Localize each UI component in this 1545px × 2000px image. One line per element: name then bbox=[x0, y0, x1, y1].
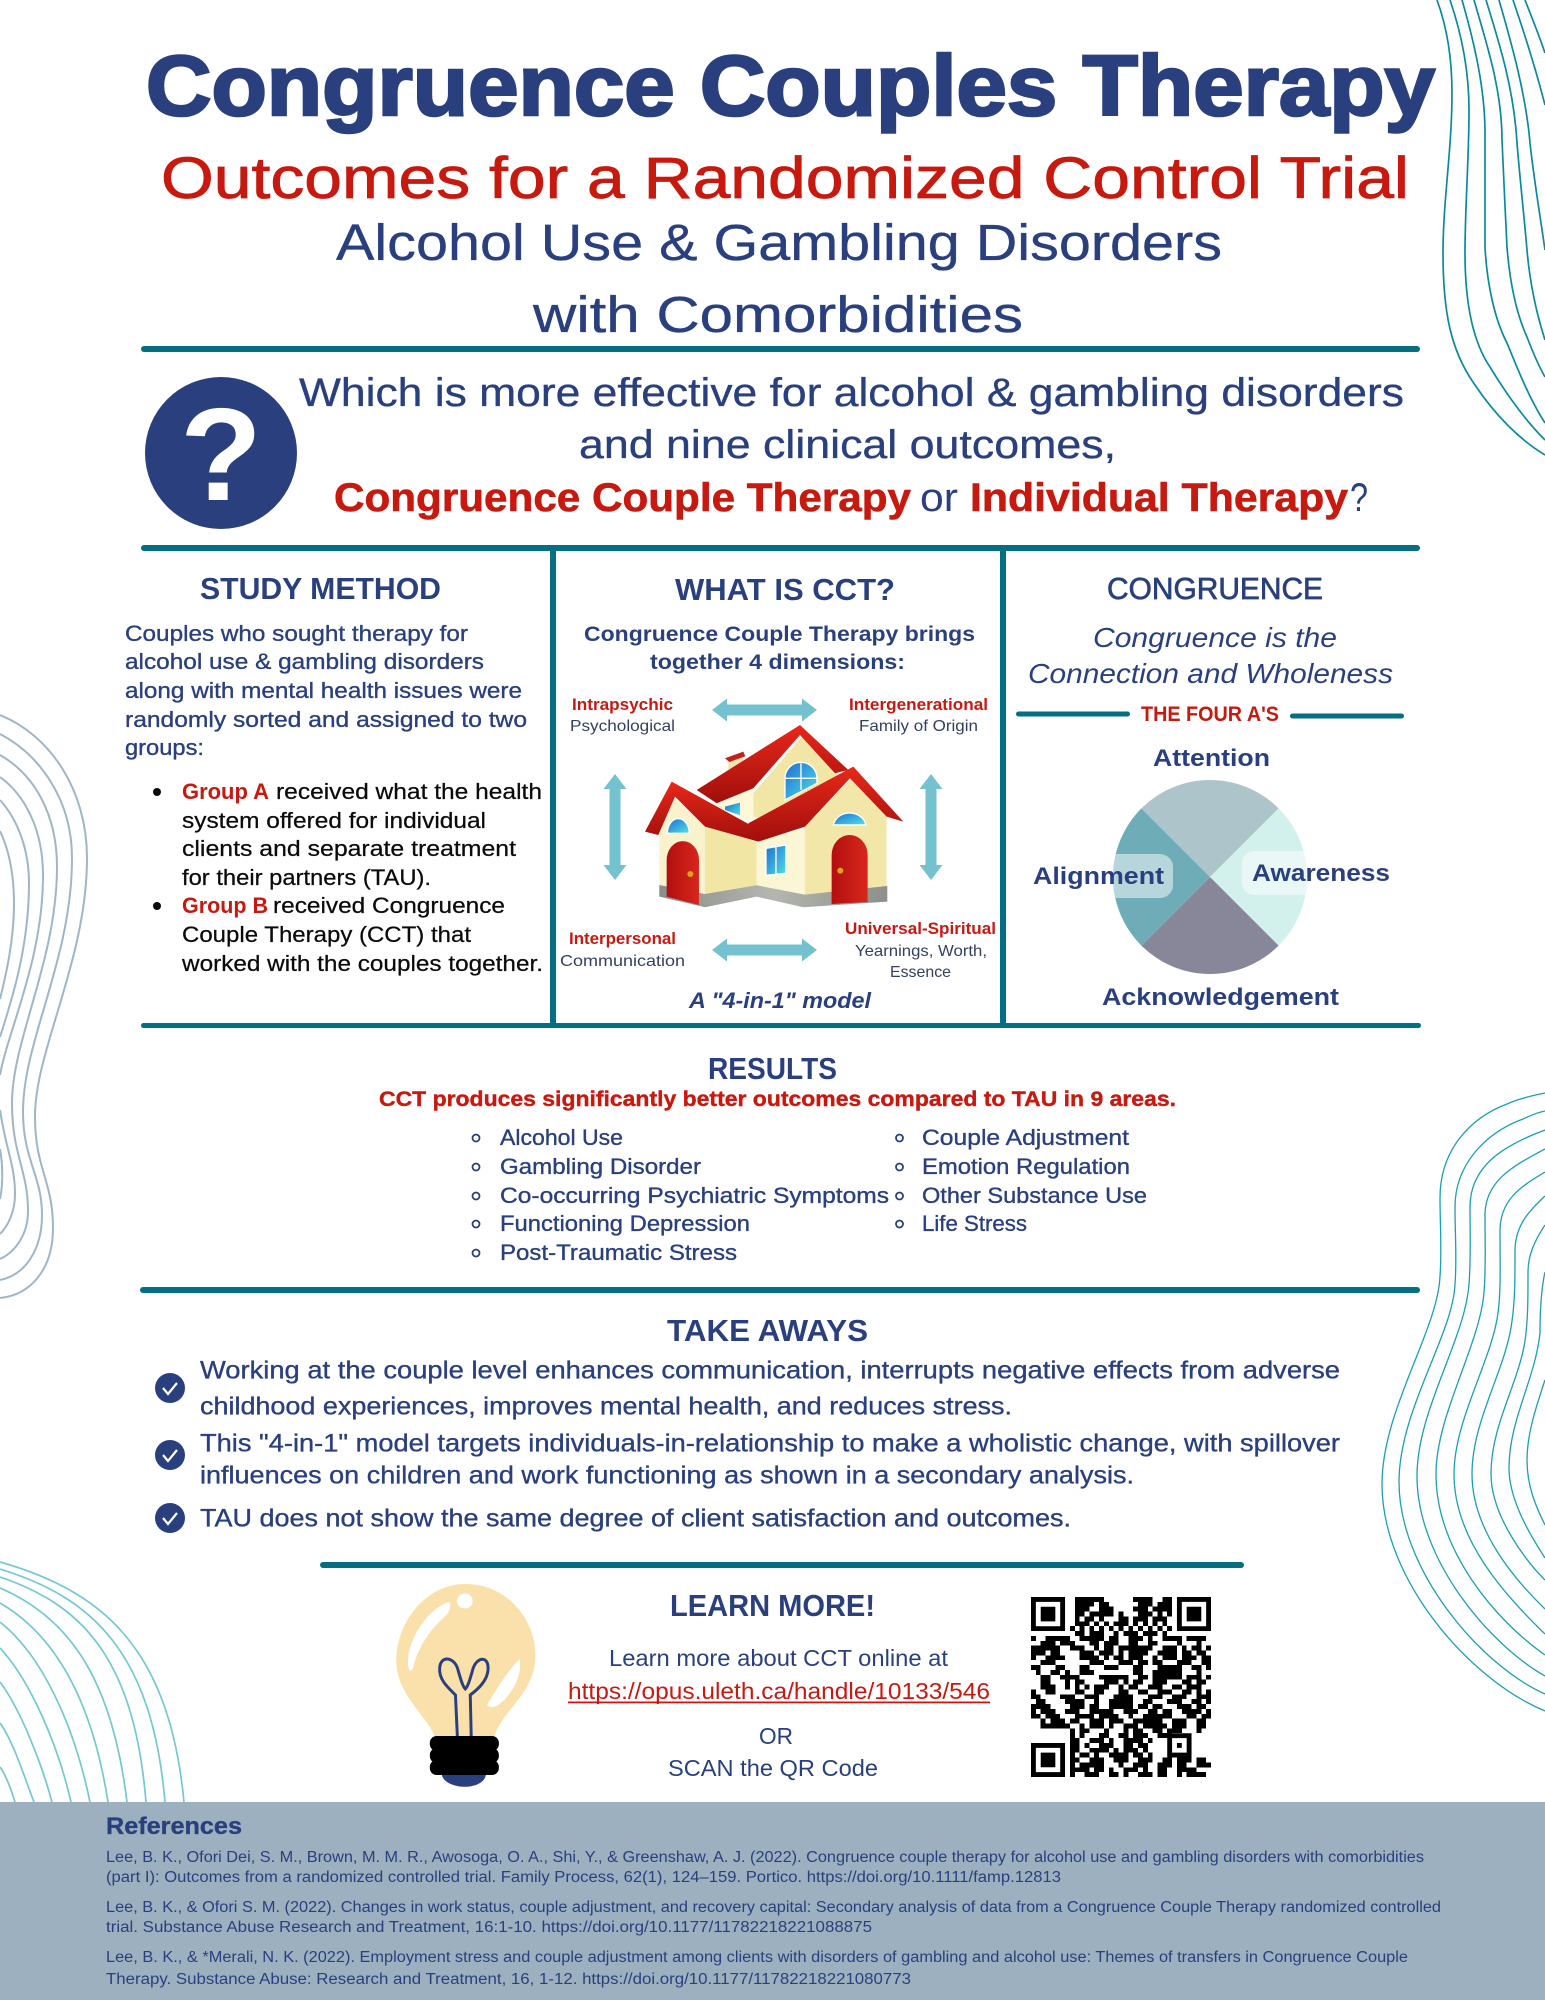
caption: 4-in-1 model: A "4-in-1" model bbox=[688, 988, 872, 1013]
research question bbox=[299, 371, 1404, 520]
sub-heading: the four A's: THE FOUR A'S bbox=[1141, 703, 1279, 726]
icon: house bbox=[645, 725, 903, 907]
icon: question mark: ? bbox=[180, 381, 262, 528]
CCT intro text bbox=[584, 623, 975, 674]
take away 2: This "4-in-1" model targets individuals-in-relationship to make a wholistic change, with spillover bbox=[200, 1430, 1340, 1458]
research question: Individual Therapy bbox=[970, 476, 1349, 520]
decorative curves: left middle bbox=[0, 715, 87, 1298]
heading: take aways: TAKE AWAYS bbox=[667, 1313, 868, 1348]
label: interpersonal: Communication bbox=[560, 953, 685, 970]
heading: study method: STUDY METHOD bbox=[200, 571, 441, 606]
group B text bbox=[153, 893, 543, 976]
decorative curves: bottom left bbox=[0, 1562, 184, 1802]
heading: results: RESULTS bbox=[708, 1051, 837, 1086]
heading: congruence: CONGRUENCE bbox=[1107, 571, 1323, 606]
label: universal-spiritual: Yearnings, Worth, bbox=[855, 943, 987, 960]
results list: left column: Functioning Depression bbox=[500, 1211, 750, 1236]
heading: what is CCT: WHAT IS CCT? bbox=[675, 572, 895, 607]
CCT intro text: Congruence Couple Therapy brings bbox=[584, 623, 975, 646]
take away 2 bbox=[155, 1430, 1340, 1490]
panel: congruence bbox=[1016, 571, 1404, 1011]
reference 1: Lee, B. K., Ofori Dei, S. M., Brown, M. M. R., Awosoga, O. A., Shi, Y., & Greenshaw, A. J. (2022). Congruence couple therapy for alcohol use and gambling disorders with comorbidities bbox=[106, 1849, 1424, 1866]
CCT intro text: together 4 dimensions: bbox=[650, 651, 905, 674]
take away 3: TAU does not show the same degree of client satisfaction and outcomes. bbox=[200, 1504, 1071, 1532]
congruence definition: Congruence is the bbox=[1093, 622, 1337, 653]
label: interpersonal bbox=[560, 930, 685, 970]
learn more text: Learn more about CCT online at bbox=[609, 1645, 949, 1671]
congruence definition: Connection and Wholeness bbox=[1028, 658, 1393, 689]
icon: question mark bbox=[145, 377, 297, 529]
reference 1 bbox=[106, 1849, 1424, 1886]
take away 1 bbox=[155, 1356, 1340, 1420]
results summary: CCT produces significantly better outcomes compared to TAU in 9 areas. bbox=[379, 1087, 1176, 1111]
results list: right column: Emotion Regulation bbox=[922, 1154, 1130, 1179]
take away 1: childhood experiences, improves mental health, and reduces stress. bbox=[200, 1392, 1012, 1420]
label: attention: Attention bbox=[1153, 745, 1270, 772]
label: intergenerational: Family of Origin bbox=[859, 718, 978, 735]
panel: study method bbox=[125, 571, 543, 976]
panel: what is CCT bbox=[560, 572, 996, 1013]
study method intro text: groups: bbox=[125, 735, 204, 760]
reference 1: (part I): Outcomes from a randomized controlled trial. Family Process, 62(1), 124–159. Portico. https://doi.org/10.1111/famp.12813 bbox=[106, 1869, 1061, 1886]
subheading bbox=[336, 214, 1222, 343]
panel: references bbox=[0, 1802, 1545, 2000]
reference 3: Lee, B. K., & *Merali, N. K. (2022). Employment stress and couple adjustment among clients with disorders of gambling and alcohol use: Themes of transfers in Congruence Couple bbox=[106, 1949, 1408, 1966]
label: intrapsychic: Psychological bbox=[570, 718, 675, 735]
title: Congruence Couples Therapy bbox=[146, 39, 1435, 134]
label: universal-spiritual: Universal-Spiritual bbox=[845, 920, 996, 938]
research question: or bbox=[920, 476, 958, 520]
label: intrapsychic bbox=[570, 696, 675, 735]
results list: left column bbox=[472, 1125, 889, 1265]
study method intro text: along with mental health issues were bbox=[125, 678, 522, 703]
arrow: bottom horizontal bbox=[712, 938, 817, 962]
results list: right column: Life Stress bbox=[922, 1211, 1027, 1236]
results list: left column: Co-occurring Psychiatric Symptoms bbox=[500, 1183, 889, 1208]
results list: left column: Post-Traumatic Stress bbox=[500, 1240, 737, 1265]
subheading: Alcohol Use & Gambling Disorders bbox=[336, 214, 1222, 271]
label: awareness: Awareness bbox=[1252, 860, 1390, 887]
study method intro text bbox=[125, 621, 527, 760]
decorative curves: right lower bbox=[1382, 1093, 1545, 1711]
subheading: with Comorbidities bbox=[532, 286, 1023, 343]
research question: Congruence Couple Therapy bbox=[334, 476, 912, 520]
panel: learn more bbox=[568, 1588, 990, 1781]
icon: lightbulb bbox=[396, 1584, 535, 1787]
study method intro text: randomly sorted and assigned to two bbox=[125, 707, 527, 732]
label: acknowledgement: Acknowledgement bbox=[1102, 984, 1339, 1011]
heading: references: References bbox=[106, 1813, 242, 1840]
group A text: clients and separate treatment bbox=[182, 836, 516, 861]
group B text: Couple Therapy (CCT) that bbox=[182, 922, 471, 947]
group B text: received Congruence bbox=[273, 893, 505, 918]
results list: right column: Other Substance Use bbox=[922, 1183, 1147, 1208]
sub-heading: the four A's bbox=[1016, 703, 1404, 726]
take away 2: influences on children and work functioning as shown in a secondary analysis. bbox=[200, 1462, 1134, 1490]
results list: right column bbox=[896, 1125, 1147, 1236]
scan instructions: OR bbox=[759, 1723, 793, 1749]
decorative curves: top right bbox=[1437, 0, 1545, 455]
arrow: top horizontal bbox=[712, 698, 817, 722]
results list: left column: Gambling Disorder bbox=[500, 1154, 701, 1179]
results list: left column: Alcohol Use bbox=[500, 1125, 623, 1150]
study method intro text: Couples who sought therapy for bbox=[125, 621, 468, 646]
take away 1: Working at the couple level enhances communication, interrupts negative effects from adverse bbox=[200, 1356, 1340, 1384]
group B text: Group B bbox=[182, 893, 268, 918]
label: intergenerational bbox=[849, 696, 988, 735]
reference 3: Therapy. Substance Abuse: Research and Treatment, 16, 1-12. https://doi.org/10.1177/11782218221080773 bbox=[106, 1971, 911, 1988]
group B text: worked with the couples together. bbox=[181, 951, 543, 976]
scan instructions: SCAN the QR Code bbox=[668, 1755, 878, 1781]
label: intergenerational: Intergenerational bbox=[849, 696, 988, 714]
group A text bbox=[153, 779, 542, 890]
label: universal-spiritual: Essence bbox=[890, 964, 951, 981]
group A text: system offered for individual bbox=[182, 808, 486, 833]
label: intrapsychic: Intrapsychic bbox=[572, 696, 673, 714]
reference 2: Lee, B. K., & Ofori S. M. (2022). Changes in work status, couple adjustment, and recovery capital: Secondary analysis of data from a Congruence Couple Therapy randomized controlled bbox=[106, 1899, 1441, 1916]
reference 2 bbox=[106, 1899, 1441, 1936]
QR code bbox=[1031, 1597, 1211, 1777]
panel: results bbox=[379, 1051, 1176, 1265]
research question: Which is more effective for alcohol & gambling disorders bbox=[299, 371, 1404, 415]
label: universal-spiritual bbox=[845, 920, 996, 981]
arrow: right vertical bbox=[920, 774, 942, 880]
subtitle: Outcomes for a Randomized Control Trial bbox=[161, 146, 1409, 211]
link: https://opus.uleth.ca/handle/10133/546 bbox=[568, 1678, 990, 1704]
arrow: left vertical bbox=[604, 774, 626, 880]
research question: ? bbox=[1350, 476, 1368, 520]
group A text: for their partners (TAU). bbox=[182, 865, 431, 890]
label: interpersonal: Interpersonal bbox=[569, 930, 676, 948]
reference 2: trial. Substance Abuse Research and Treatment, 16:1-10. https://doi.org/10.1177/11782218221088875 bbox=[106, 1919, 872, 1936]
research question: and nine clinical outcomes, bbox=[579, 423, 1116, 467]
chart: four A's pie bbox=[1113, 780, 1307, 974]
label: alignment: Alignment bbox=[1033, 863, 1164, 890]
study method intro text: alcohol use & gambling disorders bbox=[125, 649, 484, 674]
panel: take aways bbox=[155, 1313, 1340, 1533]
results list: right column: Couple Adjustment bbox=[922, 1125, 1129, 1150]
group A text: Group A bbox=[182, 779, 269, 804]
congruence definition bbox=[1028, 622, 1393, 689]
scan instructions bbox=[668, 1723, 878, 1781]
reference 3 bbox=[106, 1949, 1408, 1988]
heading: learn more: LEARN MORE! bbox=[670, 1588, 875, 1623]
group A text: received what the health bbox=[276, 779, 542, 804]
